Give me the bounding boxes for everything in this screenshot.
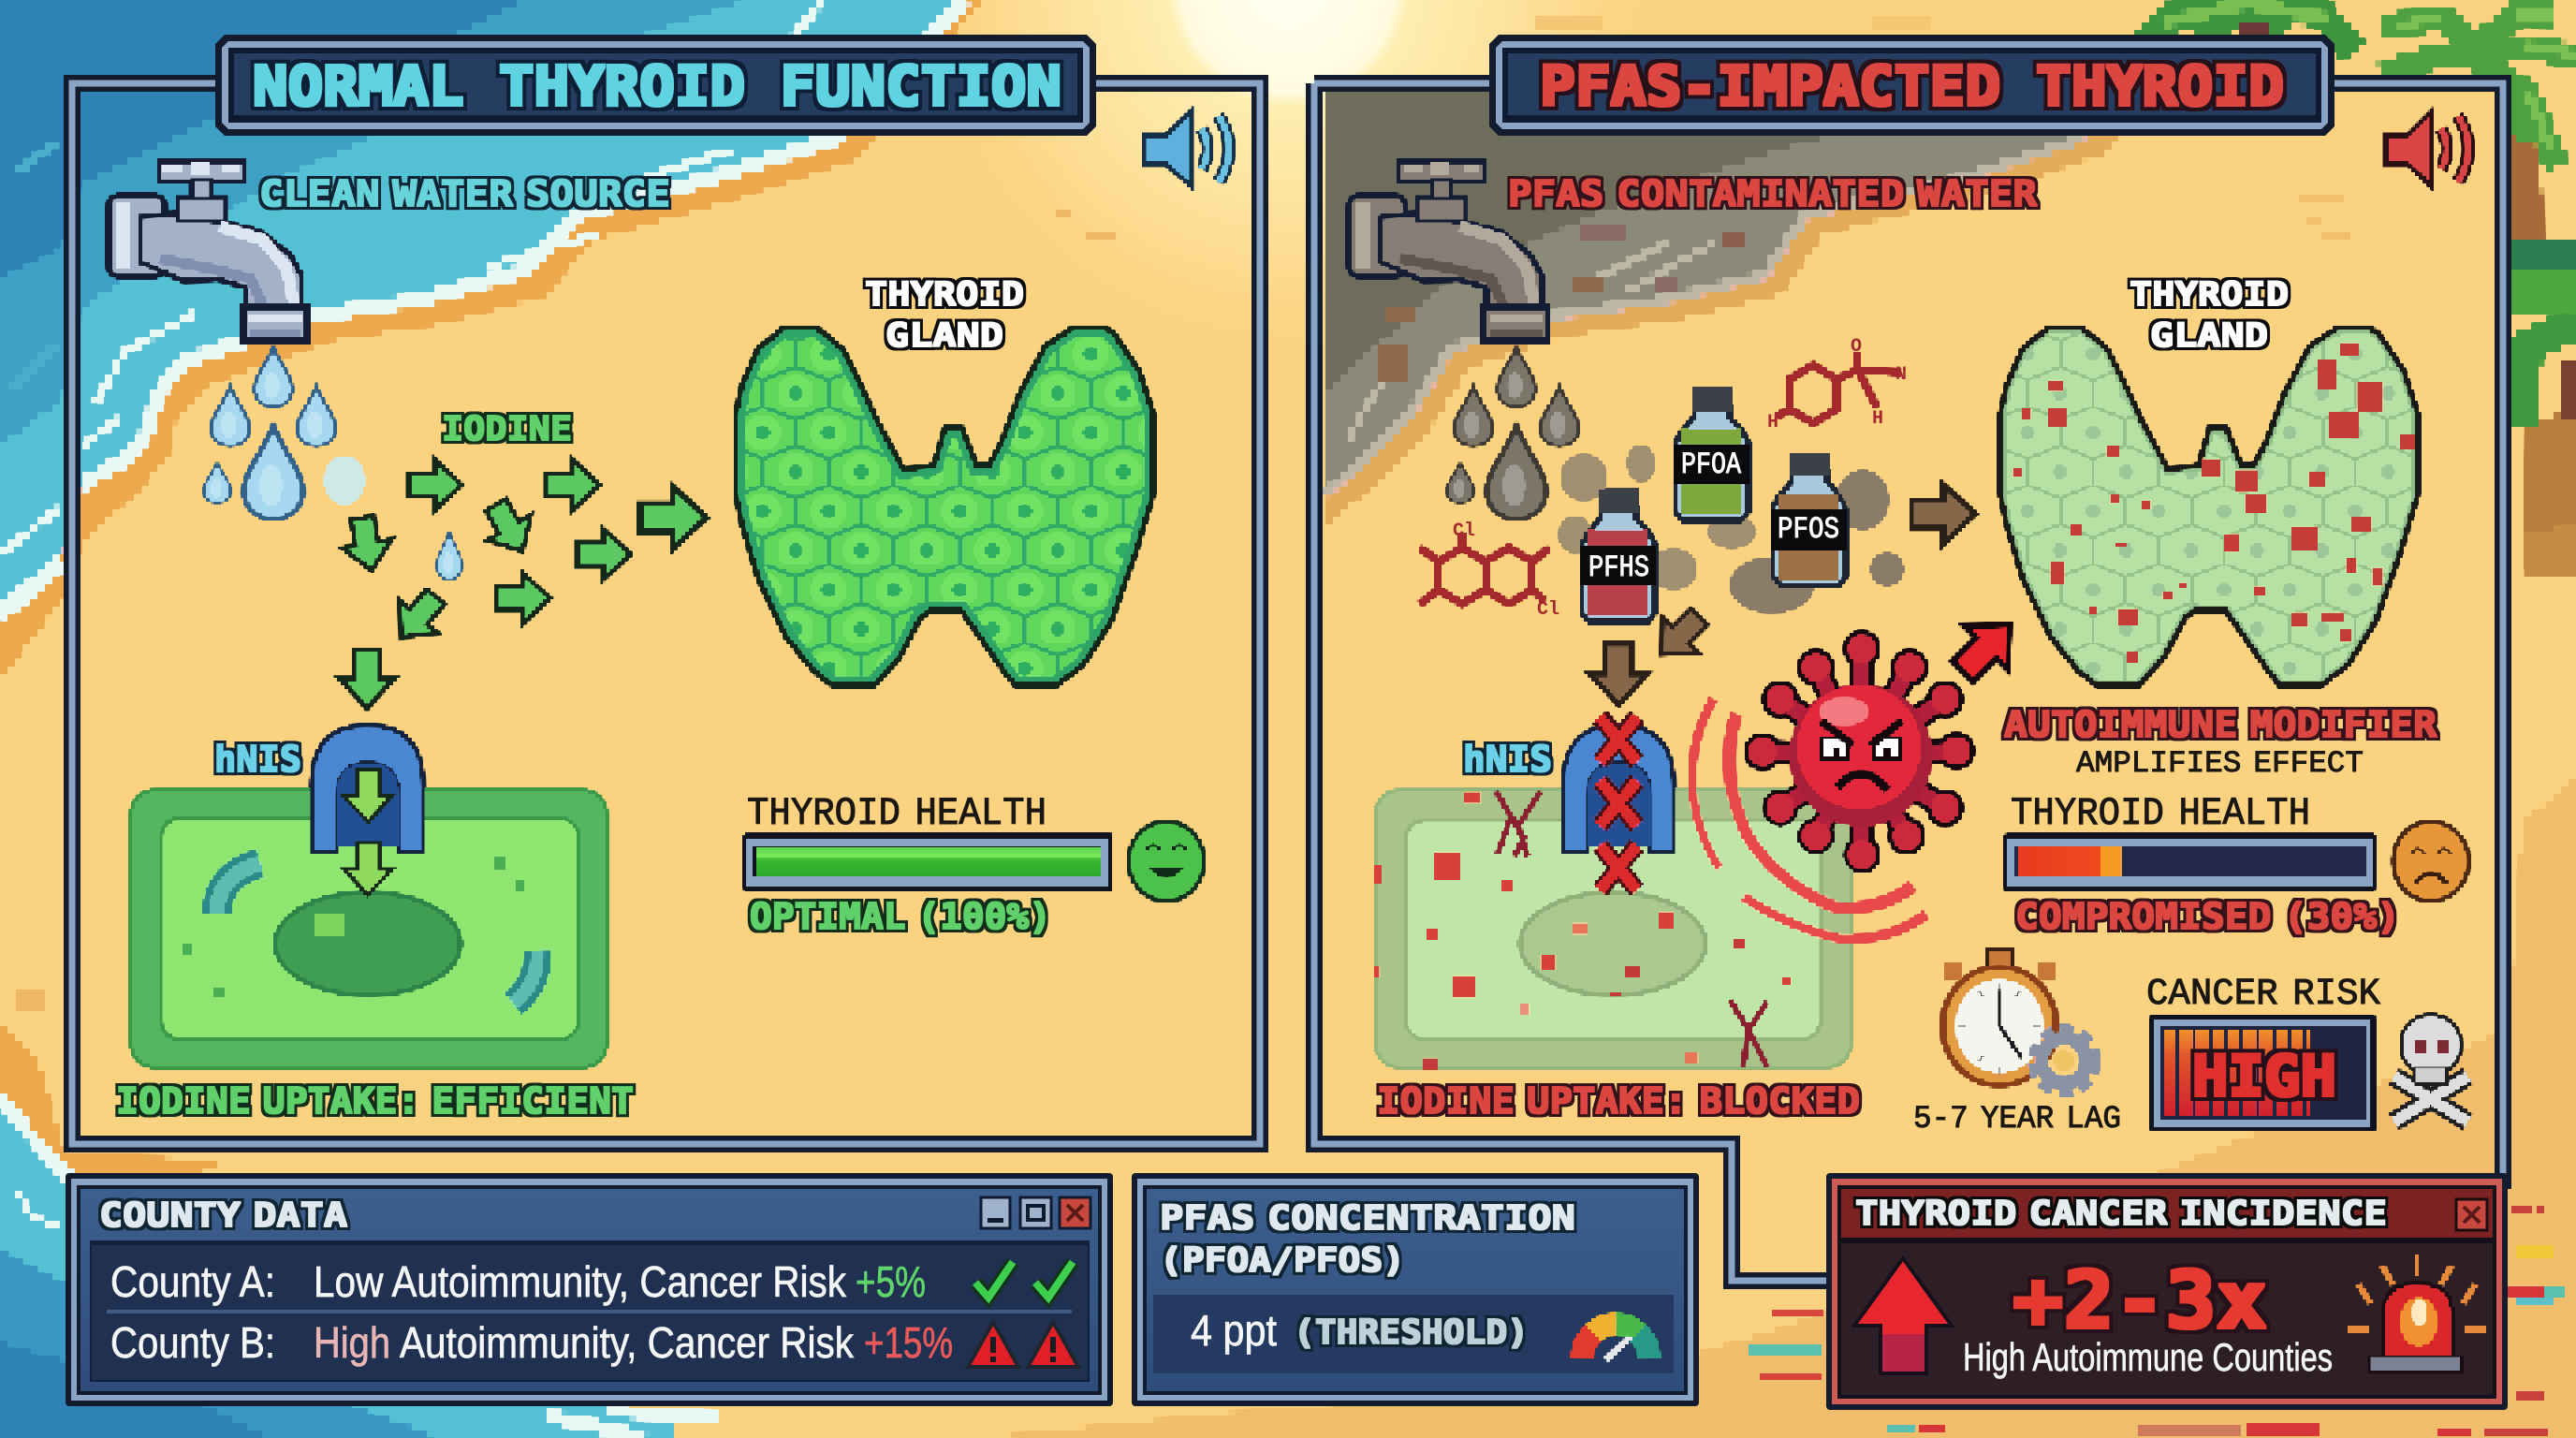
pollution blobs [1559, 445, 1904, 613]
bottle label: PFHS: PFHS [1588, 550, 1649, 585]
icon: contaminated faucet [1349, 159, 1547, 341]
icon: stopwatch and gear [1939, 950, 2094, 1091]
icon: sad face [2393, 822, 2468, 901]
value row: (THRESHOLD) [1294, 1313, 1529, 1352]
damage spots on thyroid [2012, 343, 2414, 664]
label: autoimmune modifier: AUTOIMMUNE MODIFIER [2004, 704, 2437, 745]
label: optimal: OPTIMAL (100%) [750, 896, 1051, 937]
label: thyroid gland [2130, 276, 2289, 355]
panel: pfas concentration [1132, 1173, 1699, 1406]
label: year lag: 5-7 YEAR LAG [1913, 1102, 2121, 1137]
row: county B: County B: [110, 1318, 275, 1367]
label: thyroid gland [865, 276, 1024, 355]
label: cancer risk: CANCER RISK [2146, 974, 2380, 1016]
icon: contaminated drops [1447, 348, 1578, 519]
heading plate [1489, 35, 2334, 136]
hNIS channel damaged [1563, 717, 1674, 890]
window frame [1826, 1173, 2508, 1410]
heading: THYROID CANCER INCIDENCE [1855, 1195, 2387, 1233]
label: high: HIGH [2192, 1044, 2336, 1109]
icon: siren [2348, 1255, 2486, 1372]
label: contaminated water: PFAS CONTAMINATED WATER [1508, 173, 2037, 214]
molecule atom labels: Cl [1537, 599, 1559, 621]
icon: up arrow [1854, 1258, 1952, 1373]
shock arcs [1692, 699, 1925, 939]
molecule atom labels [1453, 336, 1907, 621]
window frame [66, 1173, 1113, 1406]
heading plate [215, 35, 1096, 136]
value row: 4 ppt [1191, 1306, 1277, 1355]
window buttons [981, 1197, 1090, 1228]
row: county B: +15% [864, 1318, 953, 1367]
panel: pfas-impacted thyroid [1314, 35, 2503, 1281]
high risk meter [2150, 1015, 2376, 1132]
row: county B: High [314, 1318, 390, 1367]
panel: thyroid cancer incidence [1826, 1173, 2508, 1410]
label: iodine uptake: IODINE UPTAKE: EFFICIENT [116, 1080, 634, 1122]
label: clean water: CLEAN WATER SOURCE [259, 173, 670, 214]
label: iodine uptake blocked: IODINE UPTAKE: BLOCKED [1377, 1080, 1860, 1122]
value: +2-3x [2012, 1255, 2267, 1346]
icon: iodine arrows [339, 461, 706, 708]
panel: normal thyroid function [72, 35, 1260, 1144]
panel border with connector [1314, 83, 2503, 1281]
icon: happy face [1129, 822, 1204, 901]
sun glow [895, 0, 1681, 379]
row: county A [110, 1257, 1073, 1306]
value row [1153, 1295, 1674, 1373]
label: compromised: COMPROMISED (30%) [2015, 896, 2400, 937]
row: county A: +5% [856, 1257, 926, 1306]
hNIS channel [312, 726, 423, 895]
molecule atom labels: H [1767, 412, 1778, 433]
row: county B [110, 1318, 1078, 1367]
bottle label: PFOS: PFOS [1778, 512, 1839, 547]
label: thyroid gland: GLAND [2150, 317, 2268, 355]
label: amplifies effect: AMPLIFIES EFFECT [2076, 746, 2364, 781]
data table [90, 1240, 1090, 1382]
molecule atom labels: O [1851, 336, 1862, 358]
glitch streaks [1749, 1206, 2565, 1436]
label: thyroid health: THYROID HEALTH [2011, 791, 2310, 836]
panel: county data [66, 1173, 1113, 1406]
molecule atom labels: Cl [1453, 521, 1475, 542]
title: PFAS-IMPACTED THYROID [1540, 54, 2284, 118]
artwork group [109, 112, 1229, 1067]
damaged cell [1373, 790, 1851, 1069]
red arrow to thyroid [1941, 603, 2031, 693]
damaged nucleus [1520, 892, 1705, 995]
title: NORMAL THYROID FUNCTION [253, 54, 1061, 118]
molecule atom labels: H [1872, 408, 1883, 430]
heading: PFAS CONCENTRATION [1160, 1199, 1575, 1238]
blocked markers [1600, 717, 1637, 890]
label: thyroid gland: THYROID [2130, 276, 2289, 314]
label: thyroid gland: THYROID [865, 276, 1024, 314]
nucleus [275, 892, 461, 995]
heading: (PFOA/PFOS) [1160, 1241, 1405, 1280]
icon: sound speaker [1145, 112, 1229, 185]
virus: autoimmune modifier [1744, 630, 1975, 873]
thyroid gland: healthy [730, 323, 1161, 693]
icon: skull and crossbones [2394, 1015, 2467, 1122]
window heading: COUNTY DATA [99, 1196, 347, 1235]
panel border [72, 83, 1260, 1144]
heading [1160, 1199, 1575, 1280]
icon: clean faucet [109, 159, 307, 341]
bottles: PFOA, PFOS, PFHS [1580, 388, 1848, 622]
thyroid gland: damaged [1995, 323, 2425, 693]
icon: water drops [204, 348, 461, 580]
palm tree B [2382, 13, 2576, 577]
palm tree A [2144, 4, 2353, 51]
row: county A: County A: [110, 1257, 275, 1306]
row: county A: Low Autoimmunity, Cancer Risk [314, 1257, 847, 1306]
icon: gauge [1582, 1324, 1649, 1359]
label: iodine: IODINE [442, 410, 572, 448]
label: hNIS: hNIS [214, 739, 301, 780]
cracks [1496, 791, 1767, 1067]
icon: sound speaker red [2386, 112, 2468, 185]
polluted water [1323, 92, 2153, 529]
artwork group [1349, 112, 2468, 1132]
health bar [743, 833, 1113, 891]
caption: High Autoimmune Counties [1963, 1335, 2333, 1379]
label: thyroid gland: GLAND [886, 317, 1003, 355]
row: county B: Autoimmunity, Cancer Risk [400, 1318, 855, 1367]
thyroid cell [131, 790, 607, 1067]
molecule: red ring B [1420, 534, 1549, 604]
label: hNIS: hNIS [1463, 739, 1552, 780]
molecule: red ring A [1777, 351, 1900, 423]
label: thyroid health: THYROID HEALTH [747, 791, 1046, 836]
close button [2456, 1199, 2487, 1230]
sand specks [1058, 211, 1071, 220]
molecule atom labels: N [1895, 364, 1907, 386]
bottle label: PFOA: PFOA [1681, 448, 1742, 482]
window frame [1132, 1173, 1699, 1406]
health bar compromised [2004, 833, 2376, 891]
brown arrows [1590, 485, 1975, 704]
